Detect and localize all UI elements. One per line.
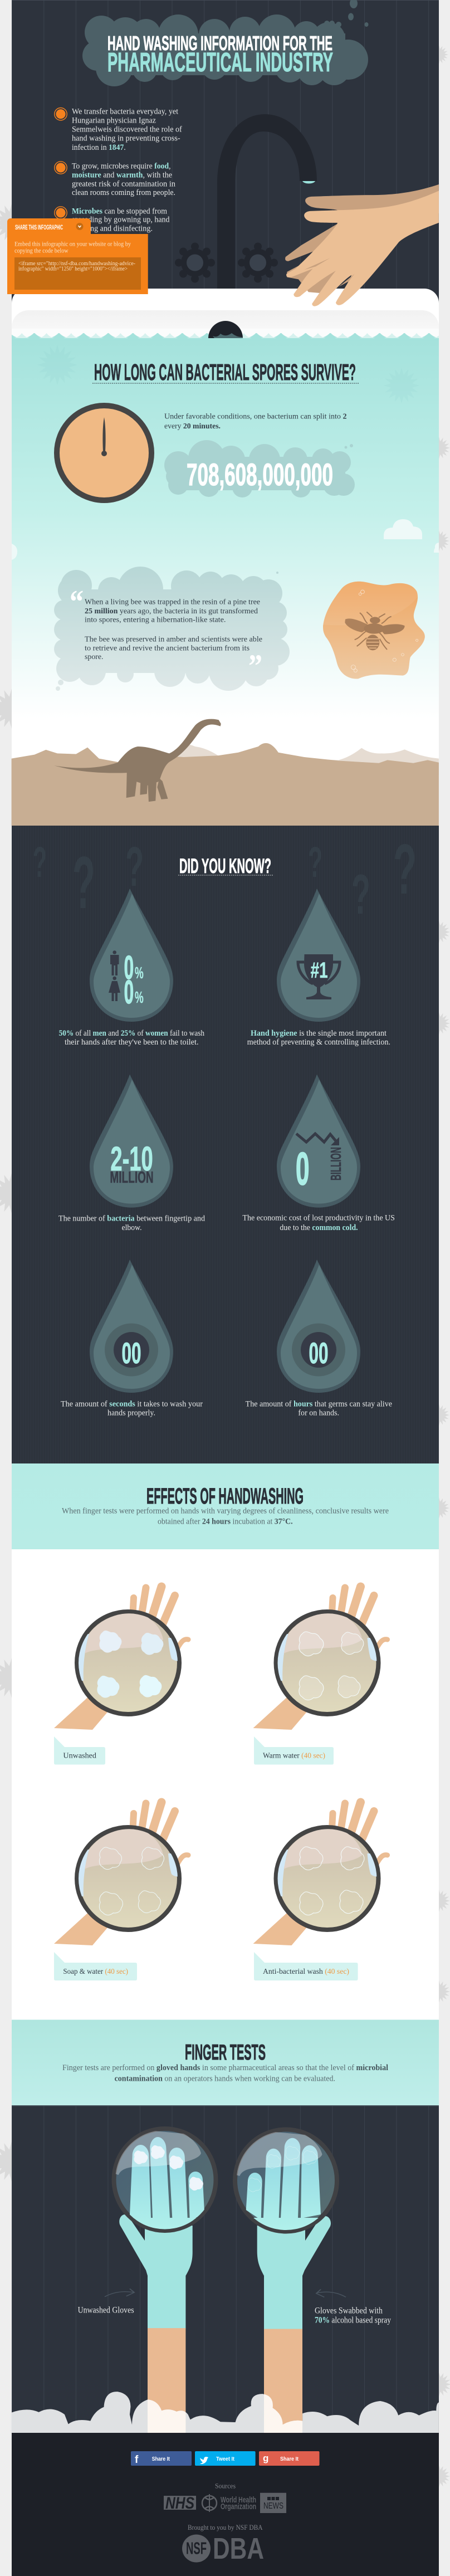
icon: left gloved hand	[111, 2128, 216, 2433]
intro text: obtained after 24 hours incubation at 37°C.	[158, 1518, 293, 1526]
stat badge: 00	[121, 1337, 141, 1370]
title cloud	[82, 0, 369, 86]
intro bullets: clean rooms coming from people.	[72, 188, 175, 197]
label: Anti-bacterial wash (40 sec)	[263, 1968, 349, 1976]
quote text: 25 million years ago, the bacteria in its gut transformed	[85, 607, 258, 615]
fact: bacteria count	[58, 1075, 206, 1232]
quote marks: ”	[248, 648, 262, 684]
label: swabbed gloves	[315, 2306, 391, 2325]
caption: for on hands.	[298, 1408, 339, 1417]
caption: Hand hygiene is the single most important	[251, 1029, 387, 1038]
intro bullets: greatest risk of contamination in	[72, 179, 176, 188]
stat badge	[292, 1324, 345, 1376]
button: facebook: Share It	[152, 2456, 170, 2462]
caption	[247, 1029, 390, 1047]
caption: The economic cost of lost productivity in the US	[242, 1213, 395, 1222]
button: twitter	[195, 2451, 256, 2466]
button: facebook	[131, 2451, 192, 2466]
stat: 2-10 million	[110, 1140, 154, 1187]
stat: 2-10 million: MILLION	[110, 1169, 154, 1187]
stat values: %	[135, 989, 144, 1007]
caption: method of preventing & controlling infection.	[247, 1038, 390, 1047]
stat badge	[105, 1324, 158, 1376]
logo: BBC News	[260, 2493, 286, 2513]
embed code box	[14, 257, 141, 290]
caption: hands properly.	[107, 1408, 155, 1417]
caption: The amount of hours that germs can stay alive	[246, 1399, 392, 1408]
title	[107, 32, 333, 77]
caption	[59, 1029, 205, 1047]
intro text: When finger tests were performed on hands with varying degrees of cleanliness, conclusive results were	[62, 1506, 389, 1515]
logo: NSF DBA: DBA	[213, 2532, 264, 2565]
quote marks	[70, 583, 262, 684]
intro bullets: Microbes can be stopped from	[72, 207, 168, 216]
label	[254, 1952, 358, 1980]
panel: header	[12, 0, 439, 312]
caption	[61, 1399, 203, 1417]
button: google: g	[263, 2453, 268, 2463]
logo: BBC News: NEWS	[263, 2501, 283, 2511]
embed instructions: copying the code below	[14, 247, 69, 254]
text: bacterium split: Under favorable conditions, one bacterium can split into 2	[164, 412, 347, 420]
icon: clock	[57, 406, 151, 500]
stat values: 0	[124, 949, 134, 986]
quote text	[85, 597, 262, 661]
label: swabbed gloves: 70% alcohol based spray	[315, 2315, 391, 2325]
bacteria colonies	[300, 1847, 364, 1915]
caption	[58, 1214, 206, 1232]
caption: The number of bacteria between fingertip and	[58, 1214, 206, 1223]
bacteria colonies	[97, 1631, 163, 1698]
caption: due to the common cold.	[280, 1223, 358, 1232]
sink water edge	[12, 329, 439, 339]
caption: 50% of all men and 25% of women fail to wash	[59, 1029, 205, 1038]
landscape	[12, 743, 439, 826]
button: google	[259, 2451, 320, 2466]
number cloud	[164, 440, 355, 497]
label: Unwashed	[63, 1752, 96, 1760]
icon: falling chart arrow	[296, 1134, 339, 1145]
embed code box: infographic" width="1250" height="1000"></iframe>	[18, 266, 128, 272]
intro bullets: washing and disinfecting.	[72, 224, 153, 233]
icon: faucet	[217, 114, 317, 289]
label	[254, 1736, 334, 1765]
share heading: SHARE THIS INFOGRAPHIC	[15, 223, 63, 231]
icon: dinosaur	[54, 719, 221, 802]
stat values	[124, 949, 144, 1011]
panel: petri results	[12, 1549, 439, 2020]
small clouds	[12, 519, 439, 560]
heading: FINGER TESTS	[185, 2041, 266, 2065]
label: Warm water (40 sec)	[263, 1752, 325, 1760]
background question marks: ?	[125, 836, 144, 898]
intro text	[62, 2063, 388, 2084]
icon: trophy: #1	[311, 958, 328, 983]
arrow: to right hand	[316, 2289, 346, 2297]
embed instructions: Embed this infographic on your website or blog by	[14, 241, 131, 247]
fact: seconds	[61, 1260, 203, 1417]
fact: hours	[246, 1260, 392, 1417]
sources label: Sources	[215, 2482, 236, 2490]
caption: elbow.	[121, 1223, 141, 1232]
intro bullets: moisture and warmth, with the	[72, 170, 172, 179]
embed code box: <iframe src="http://nsf-dba.com/handwashing-advice-	[18, 261, 135, 267]
quote text: When a living bee was trapped in the resin of a pine tree	[85, 597, 260, 606]
logo: World Health Organization	[202, 2494, 256, 2512]
panel: footer	[12, 2433, 439, 2576]
caption	[246, 1399, 392, 1417]
stat: 2-10 million: 2-10	[110, 1140, 153, 1178]
background question marks: ?	[33, 838, 47, 886]
background question marks: ?	[351, 863, 370, 926]
intro bullets	[55, 107, 182, 233]
intro text	[62, 1506, 389, 1526]
stat values: 0	[124, 974, 134, 1011]
label	[54, 1736, 105, 1765]
stat: 0 billion: BILLION	[327, 1147, 344, 1180]
background question marks: ?	[72, 842, 95, 924]
bacteria colonies	[299, 1632, 364, 1700]
logo: NSF DBA: NSF	[186, 2539, 207, 2558]
logo: NSF DBA	[182, 2532, 264, 2565]
logo: NHS: NHS	[165, 2494, 194, 2512]
stat values: %	[135, 964, 144, 982]
fact: hand hygiene	[247, 889, 390, 1047]
number cloud: 708,608,000,000	[187, 457, 333, 492]
intro bullets: spreading by gowning up, hand	[72, 215, 170, 224]
panel: share widget	[7, 218, 148, 294]
faint sky texture	[37, 345, 419, 403]
label: unwashed gloves: Unwashed Gloves	[78, 2305, 134, 2315]
quote cloud	[54, 567, 290, 691]
fact: economic cost	[242, 1075, 395, 1232]
caption	[242, 1213, 395, 1232]
arrow: to left hand	[105, 2289, 134, 2297]
stat: 0 billion	[296, 1143, 344, 1194]
panel: finger tests intro	[12, 2020, 439, 2105]
button: google: Share It	[280, 2456, 299, 2462]
intro text: Finger tests are performed on gloved hands in some pharmaceutical areas so that the level of microbial	[62, 2063, 388, 2072]
icon: man	[110, 950, 119, 975]
result: warm water	[253, 1587, 388, 1765]
icon: trophy	[298, 954, 340, 999]
logo: World Health Organization: World Health	[221, 2495, 256, 2505]
intro text: contamination on an operators hands when working can be evaluated.	[115, 2075, 335, 2084]
brought to you label: Brought to you by NSF DBA	[188, 2523, 263, 2531]
quote text: into spores, entering a hibernation-like state.	[85, 615, 226, 624]
icon: hands	[285, 184, 439, 306]
quote text: spore.	[85, 652, 104, 661]
icon: drain	[208, 321, 243, 338]
background question marks: ?	[393, 830, 417, 909]
result: unwashed	[54, 1587, 188, 1765]
bacteria colonies	[99, 1847, 164, 1915]
intro bullets: To grow, microbes require food,	[72, 162, 171, 170]
background question marks: ?	[308, 838, 322, 886]
result: anti-bacterial wash	[253, 1802, 388, 1980]
background question marks	[33, 830, 417, 926]
text: bacterium split: every 20 minutes.	[164, 422, 221, 430]
quote marks: “	[70, 583, 84, 619]
icon: woman	[109, 977, 120, 1001]
caption: The amount of seconds it takes to wash your	[61, 1399, 203, 1408]
icon: bee in amber	[323, 582, 425, 679]
label	[54, 1952, 137, 1980]
button: twitter: Tweet It	[216, 2456, 235, 2462]
embed instructions	[14, 241, 131, 254]
quote text: to retrieve and revive the ancient bacterium from its	[85, 644, 250, 652]
result: soap and water	[54, 1802, 188, 1980]
heading: did you know: DID YOU KNOW?	[179, 855, 271, 877]
intro bullets: infection in 1847.	[72, 143, 126, 152]
label: Soap & water (40 sec)	[63, 1968, 128, 1976]
share toggle icon	[76, 223, 84, 230]
stat badge: 00	[309, 1337, 329, 1370]
stat: 0 billion: 0	[296, 1143, 310, 1194]
intro bullets: Hungarian physician Ignaz	[72, 116, 156, 125]
soap foam clouds	[12, 2392, 439, 2433]
intro bullets: Semmelweis discovered the role of	[72, 125, 182, 134]
icon: right gloved hand	[233, 2129, 337, 2433]
icon: tap handles	[175, 243, 278, 283]
fact: men and women	[59, 889, 205, 1047]
panel: did you know	[12, 826, 439, 1463]
intro bullets: We transfer bacteria everyday, yet	[72, 107, 178, 116]
panel: effects of handwashing intro	[12, 1463, 439, 1549]
quote text: The bee was preserved in amber and scientists were able	[85, 635, 262, 643]
label: swabbed gloves: Gloves Swabbed with	[315, 2306, 383, 2315]
panel: bacterial spores background	[12, 333, 439, 826]
panel: gloves	[12, 2105, 439, 2433]
text: bacterium split	[164, 412, 347, 430]
intro bullets: hand washing in preventing cross-	[72, 134, 180, 143]
panel: sink	[12, 289, 439, 339]
caption: their hands after they've been to the toilet.	[65, 1038, 199, 1047]
logo: World Health Organization: Organization	[221, 2502, 256, 2511]
button: facebook: f	[135, 2454, 139, 2466]
